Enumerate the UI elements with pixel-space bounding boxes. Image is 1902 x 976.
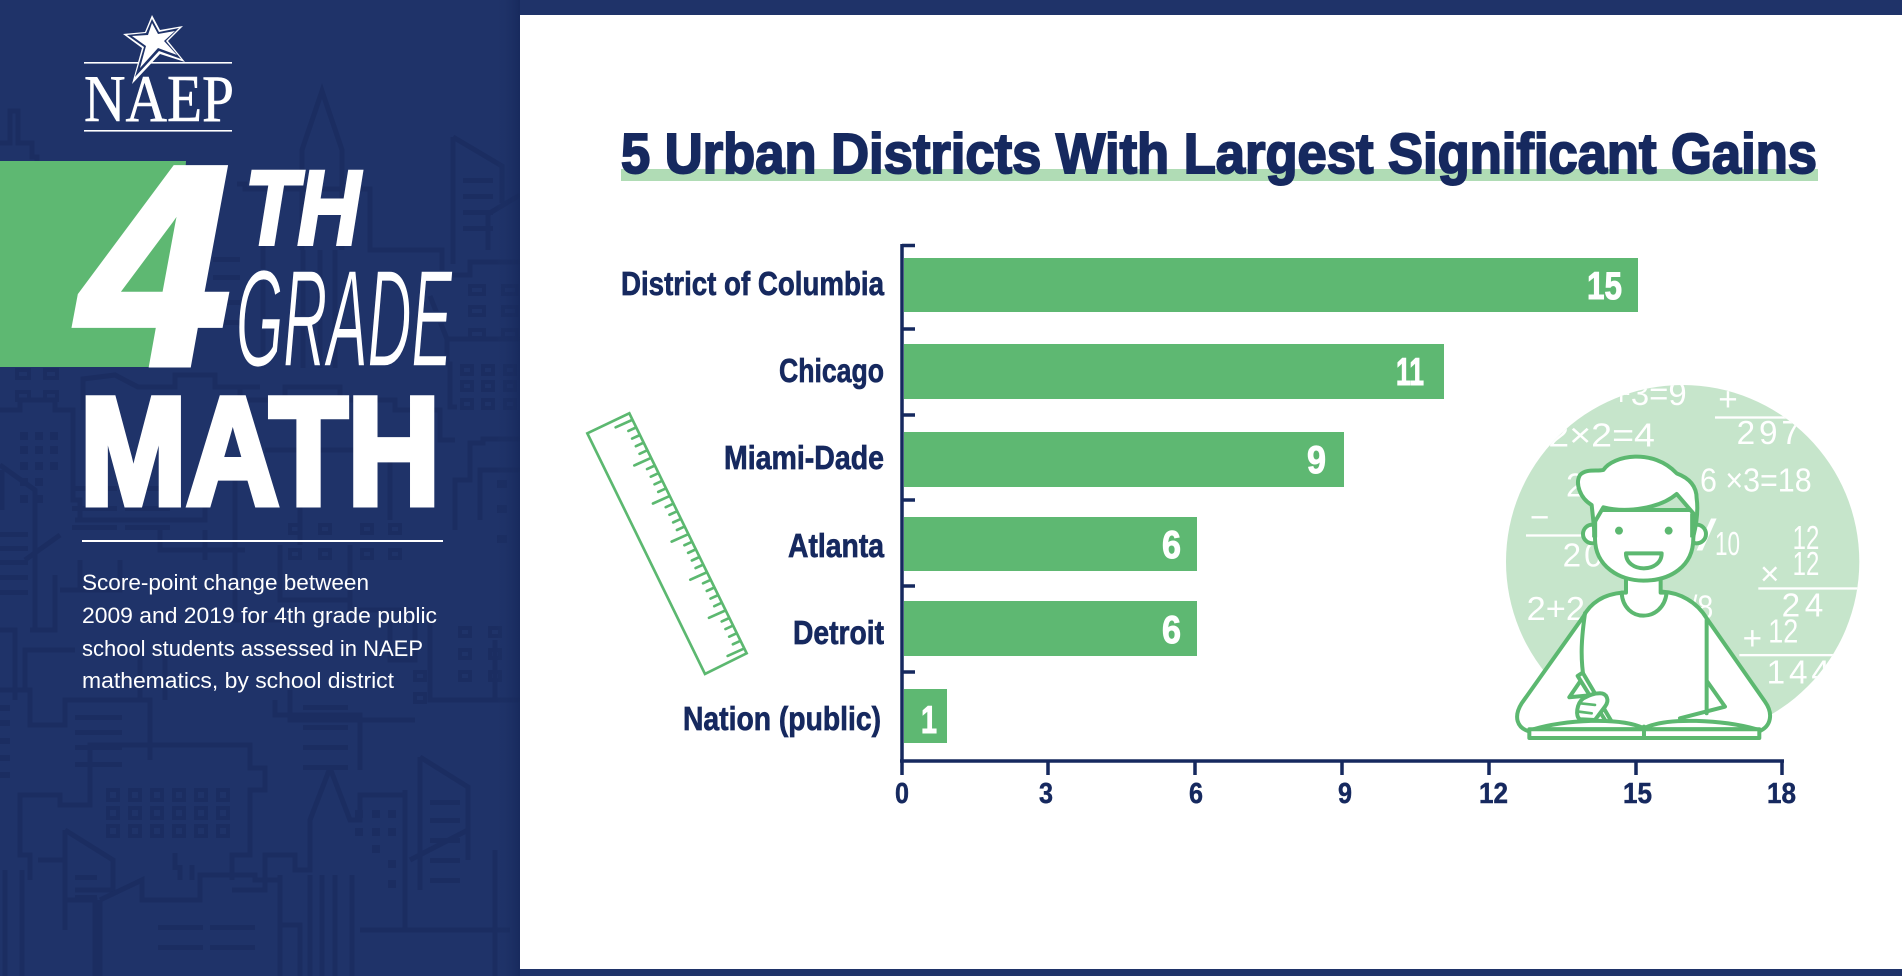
chalkboard math notes: + <box>1718 382 1738 419</box>
torso lines <box>1582 613 1707 713</box>
description text: Score-point change between <box>82 570 369 595</box>
green band <box>0 161 186 367</box>
hand <box>1577 693 1607 720</box>
body and arms <box>1517 592 1770 732</box>
text: GRADE <box>236 242 453 396</box>
value labels: 11 <box>1396 351 1424 394</box>
hair <box>1578 457 1697 537</box>
chalkboard circle <box>1506 385 1859 738</box>
axis tick labels <box>895 778 1796 810</box>
illustration: skyline solid window bars <box>0 178 507 950</box>
axis tick labels: 12 <box>1479 778 1508 810</box>
axis tick labels: 9 <box>1338 778 1352 810</box>
description text <box>82 570 437 693</box>
chalkboard math notes: / <box>1697 512 1718 560</box>
axis tick labels: 3 <box>1039 778 1053 810</box>
category labels: Detroit <box>793 614 884 651</box>
value labels: 1 <box>921 699 937 742</box>
chalkboard math notes: 3/8 <box>1673 589 1713 626</box>
paper <box>1680 682 1725 718</box>
chalkboard math notes: 2+2 <box>1527 591 1585 628</box>
category labels <box>621 265 885 737</box>
sleeve <box>1569 682 1593 697</box>
chalkboard math notes: 24 <box>1782 588 1823 625</box>
logo: NAEP <box>84 15 234 136</box>
divider rule <box>82 540 443 542</box>
TH: TH <box>245 150 362 267</box>
category labels: Nation (public) <box>683 700 881 737</box>
chalkboard math notes: 2 <box>1566 468 1585 505</box>
chalkboard math notes: − <box>1530 499 1549 536</box>
chalkboard math notes: 297 <box>1737 415 1800 452</box>
axis tick labels: 18 <box>1767 778 1796 810</box>
chart title <box>621 122 1818 186</box>
face <box>1595 510 1693 581</box>
illustration: skyline windows <box>17 286 517 836</box>
chalkboard math notes: 2×2=4 <box>1548 418 1655 455</box>
bar chart <box>621 244 1796 810</box>
boy at desk <box>1517 457 1770 738</box>
title text: 5 Urban Districts With Largest Significant Gains <box>621 122 1817 186</box>
chalkboard math notes: +3=9 <box>1612 376 1687 413</box>
logo rule top <box>84 62 232 64</box>
book <box>1533 721 1757 729</box>
icon: star <box>123 15 185 84</box>
axis tick labels: 15 <box>1623 778 1652 810</box>
fingers <box>1579 703 1595 713</box>
smile <box>1626 553 1662 568</box>
chalkboard math notes: 20 <box>1563 538 1603 575</box>
title block: 4th grade math <box>0 108 453 537</box>
illustration: chalkboard circle with boy <box>1506 376 1859 738</box>
chalkboard math notes: 10 <box>1715 526 1740 563</box>
value labels: 6 <box>1162 524 1181 567</box>
axes <box>900 244 1784 775</box>
axis tick labels: 6 <box>1189 778 1203 810</box>
pen <box>1578 673 1613 723</box>
numeral 4: 4 <box>72 108 230 425</box>
title highlight <box>621 169 1818 181</box>
category labels: Miami-Dade <box>724 439 884 476</box>
chalkboard math notes: 144 <box>1767 654 1830 691</box>
value labels: 15 <box>1587 265 1622 308</box>
category labels: Atlanta <box>788 527 885 564</box>
value labels: 9 <box>1307 439 1326 482</box>
sideburns <box>1595 513 1693 537</box>
illustration: city skyline background <box>0 91 520 976</box>
chalkboard math notes: 12 <box>1768 613 1798 650</box>
description text: school students assessed in NAEP <box>82 636 423 661</box>
chalkboard math notes: 6 ×3=18 <box>1700 463 1812 500</box>
panel edge shade <box>495 0 520 976</box>
bars <box>904 258 1638 743</box>
description text: 2009 and 2019 for 4th grade public <box>82 603 437 628</box>
MATH: MATH <box>80 366 440 537</box>
value labels: 6 <box>1162 609 1181 652</box>
eyes <box>1617 529 1621 533</box>
panel: white chart area <box>520 15 1902 969</box>
chalkboard math notes <box>1526 376 1858 691</box>
category labels: District of Columbia <box>621 265 885 302</box>
illustration: ruler <box>587 413 747 674</box>
neck and collar <box>1622 577 1667 616</box>
chalkboard math notes: + <box>1743 620 1762 657</box>
ears <box>1583 525 1602 543</box>
logo rule bottom <box>84 130 232 132</box>
logo wordmark: NAEP <box>84 62 234 136</box>
description text: mathematics, by school district <box>82 668 394 693</box>
chalkboard math notes: 12 <box>1793 546 1819 583</box>
axis tick labels: 0 <box>895 778 909 810</box>
chalkboard math notes: × <box>1760 556 1779 593</box>
category labels: Chicago <box>779 352 884 389</box>
value labels <box>921 265 1622 742</box>
chalkboard math notes: 12 <box>1793 520 1819 557</box>
